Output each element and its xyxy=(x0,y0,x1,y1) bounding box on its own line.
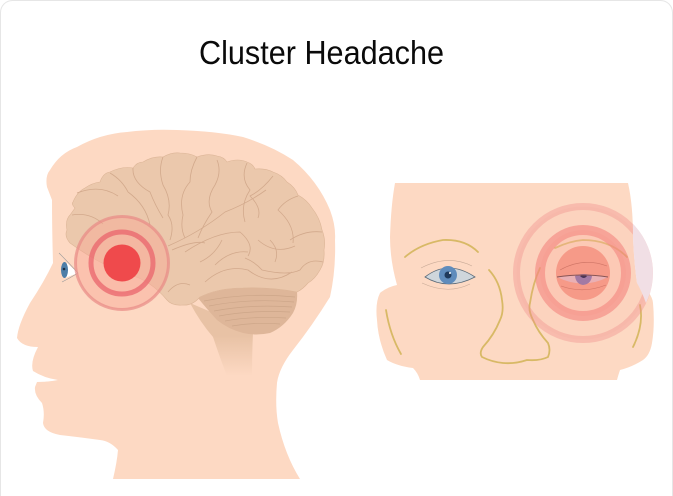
brain stem xyxy=(190,303,253,376)
brain folds xyxy=(72,157,323,292)
pain rings: eye xyxy=(516,206,650,340)
facial contour lines xyxy=(386,240,641,363)
icon: lavender glow on outer ring xyxy=(633,224,653,303)
icon: profile eye xyxy=(59,253,78,282)
icon: healthy eye xyxy=(421,260,475,289)
head silhouette xyxy=(17,130,335,479)
cerebellum xyxy=(198,288,297,334)
illustration: front view of face xyxy=(376,183,654,380)
illustration: side view of head xyxy=(17,130,335,479)
face silhouette xyxy=(376,183,654,380)
icon: red swollen eye xyxy=(557,262,608,290)
pain rings: temple xyxy=(76,216,168,310)
cerebrum xyxy=(66,153,325,305)
title: Cluster Headache xyxy=(199,34,444,71)
